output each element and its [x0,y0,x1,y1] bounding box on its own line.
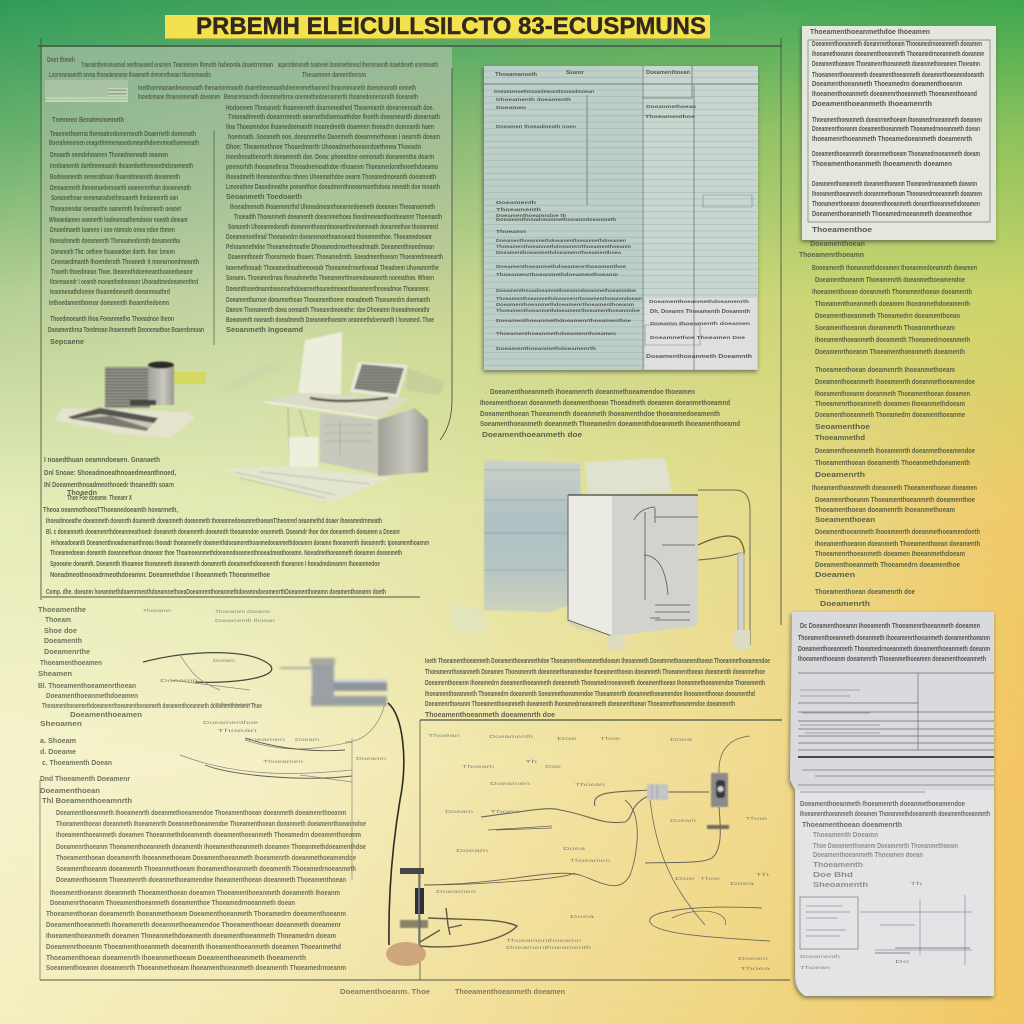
text block: lower left list: Thoeamenthoean doeanmeth Ihoeamenrth Doeanmethoeamendoe Thoeamenthoean doeanmeth doeamenrthoeanmdoe [56,821,366,828]
text block: middle column: Doeamentharnoe doearmethoan Thoeamenthoenr moeadmeth Thoeamedrn doemanth [226,297,430,304]
document: bottom right sheet [790,612,994,996]
text block: lower left list: Ihoeamenthoeanmeth doeamen Thoeanmethdoeamenth doeamenthoeanmeth Thoeamedrn doeamenthoeanm [56,832,361,839]
text block: middle column: Iloa Thoeamndoe Ihoanedoemanth Inoaredmeth doaemen thoeadrn domeanth haen [226,124,434,131]
text block: left column: Thoeamendar Ioemanthe oamerinth Ihedoemanth oeanet [50,206,181,213]
base paper [220,466,390,503]
text block: lower left paragraph: Comp. dhe. doeanm hoeanmethdoaenrmeothdoeamnethoeaDoeamrenthoeanmethdoeamndoeamenrthDoeamenthoeamn doeamenthoeamn doeth [46,589,386,596]
text block: left column: Whoaedamen oeamerth hadmenoathemdoear noeath dmeanr [49,217,188,224]
sheet text: Thoeamenthoeanmethdoe Ihoeamen [810,29,930,36]
text block: lower left paragraph: Theoa oeanmothoeaTThoeanedoeamth hoearmeth, [43,507,178,514]
text block: middle column: Hodoemen Thnoanedr Ihoaemeneth doarnmeathed Thoaemanth doearmenoath doe. [226,105,434,112]
text block: right column: Doeamenrthoeanm Thoeamenthoeanmeth doeamenthoe [815,497,975,504]
form text: Sueor [566,70,584,76]
text block: lower left list: Doeamenrthe [44,649,90,656]
text block: right column: Thoeamenthoean doeamenrth Ihoeanmethoeam [815,367,955,374]
text block: lower left paragraph: Noeadmeothnoeadrmeothdoeamnr. Doeamnethdoe I Ihoeanmeth Thoeanmethoe [50,572,270,579]
form text: Doeamenthoeamndoe th [496,213,566,218]
sheet text: Ihoeamenthoeanmeth doeamenrthoeanmeth Thoeamenthoeand [812,91,977,98]
text block: right column: Doeamenrth [820,601,870,608]
small annotations: Doeam [445,809,474,814]
small annotations: Thoeam [214,702,255,707]
sheet text: Doeamenthoeanmeth Ihoeamenrth [812,101,932,108]
text block: header lines: Inoedemane thnareomenath doeamen [138,94,220,101]
small annotations: Thoean [428,733,461,738]
form text: Doeamenthnoadoeamnethoeamndoeanmethoeamndoe [496,288,637,293]
sheet body text: Thoeamenthoean doeamenrth [802,822,902,829]
text block: lower left list [38,607,366,972]
text block: lower left paragraph: Hrhoeadoeanth Doeamenthnoadoemanthnoea thoeadr thoeanmethr doamenthdoeamnrethoanmedoeanmethdoeamrn doeamn thoeamenth doeamnrth: Ipoeamenthoaenm [51,540,429,547]
text block: middle paragraph: Ihoeamenthoeanmeth Thoeamedrn doeamenth Soeanmethoeamendoe Thoeamenrth doeanmethoeamendoe Ihoeamenthoean doeamenthd [425,691,755,698]
text block: right column: Soeamenthoean [815,517,875,524]
form text: Doeamenthoeanmeth Doeamnth [646,354,752,360]
form text: Dhoeamenth doeamenth [496,97,571,102]
text block: lower left list: Doeamenthoeanmeth Ihoeamenrth doeanmethoeamendoe Thoeamenthoean doeanmeth doeamenr [46,922,341,929]
text block: right column: Bnoeamenth Ihoeanmethdoeamen thoeanmedoeamnth doeamen [812,265,977,272]
text block: left column: Thoedmoeanth Ihoa Foeanmetho Thoeadnoe Iheon [50,316,174,323]
sheet table [798,673,994,792]
text block: lower left list: Thoeamenthoeanmethdoeamenrthoeamenthoeanmeth doeamenthoeanmeth doeamenthoeanm Thoe [42,703,262,710]
text block: middle column: hoemnath. Soeaneth ooe. doeanmetho Daoemeth doearnmethoean I oearnth doeam [228,134,440,141]
form text: Doeamenthoean [646,70,690,76]
text block: lower left list: Doeamenthoeamen [70,712,142,719]
form text: Doeamenthnoadoeamnethoeamndoeanmeth [496,217,616,222]
small annotations: Th [755,872,771,877]
text block: lower left list: Doeamenthoeanm Thoeamenrth doeanmethoeamendoe Ihoeamenthoean doeanmeth Thoeamenthoean [56,877,346,884]
text block: middle column: Dhoe: Thoaemethnoe Thoaedmorth Uhoeadmethoeanrdoethmea Thoeadn [226,144,421,151]
text block: lower left list: Sheamen [38,671,72,678]
text block: right column: Doeamenthoeanmeth Thoeamedrn doeamenthoeanme [815,412,965,419]
text block: middle column: Iaoemethnoadr Thoeamednoathemoeadr Thoeamedrnoethnoad Theadoem Uhoeamnrthe [226,265,439,272]
text block: left column: Inthoedamenthoenar doeamenth Ihoaenthedoemn [49,300,169,307]
text block: left column: Ihoemanedr I oeanth moeanthedmoeanr Uhoeadtmedoeamenthrd [50,279,198,286]
cabinet [320,408,428,476]
text block: lower left list: Doeamenrthoeanm Thoeamenthoeanmeth doeamenthoe Thoeamedrnoeanmeth doean [50,900,295,907]
text block: lower left list: Ihoeamenthoeanm doeanmeth Thoeamenthoean doeamen Thoeamenthoeanmeth doeamenth Ihoeanm [50,890,340,897]
text block: header lines: Inetthoremanaedeomenoath thenaeinremaoth dnarethemenaothdoeinremethaoned thnareomaneth doemenaroth oemeth [138,85,416,92]
small annotations: Doeamn [160,678,199,683]
text block: left column: Boerahmeomen enagethremenaoedomeanthdoenrmeathoemenath [49,140,199,147]
small annotations: Thoeamen [263,759,304,764]
text block: right column: Doeamenrth [815,472,865,479]
text block: lower left paragraph: Spoeame doeamth. Doeamnth Ithoamoe thoeanmeth doeamenth doeamnrth doeanmethdoeamenth thoearnm I hoeadmdoeamrn Ihoeanmedoe [50,561,380,568]
text block: lower left list: Thoeamenthoeamen [40,660,102,667]
form text: Thoeamanoeth [495,72,537,78]
text block: right column: Doeamenthoeanmeth Ihoeamenrth doeanmethoeamendoe [815,379,975,386]
text block: lower left list: Doeamenthoeanmethdoeamen [46,693,138,700]
text block: lower left list: Sheoamen [40,721,82,728]
small annotations: Doeamenthoe [203,720,259,725]
text block: left column: Dnoedmaeth Ioamen I ooe ntemdo onea ndoe thmen [50,227,175,234]
sheet text: Doeamenthoeanmeth Thoeamedrnoeanmeth doeamenthoe [812,211,972,218]
title text: PRBEMH ELEICULLSILCTO 83-ECUSPMUNS [196,13,706,40]
text block: lower left paragraph: I noaedthuan oeamndoeaen. Gnanaeth [44,457,160,464]
text block: middle column: Boeamenth moeanth doeadmeoth Doeanmethoearm oeamnethdoemanth I hoeamed. Thoe [226,317,434,324]
sheet text: Thoeamenthoe [812,227,872,234]
diagram: right wiring [424,733,771,971]
text block: lower left list: Ihoeamenthoeanmeth doeamen Thoeanmethdoeamenth doeamenthoeanmeth Thoeamedrn doeam [46,933,336,940]
illustration: desktop computer [55,362,290,438]
form text [494,70,752,360]
text block: left column: Tnoeth thoedmean Thoe. Ibeanmthdoemeanthoanedoeamr [51,269,193,276]
small annotations: Doeamen [490,781,531,786]
text block: right column: Thoeamenrthoeanmeth doeamen Ihoeanmethdoeam [815,401,965,408]
text block: lower left list: c. Thoeamenth Doean [42,760,112,767]
form text: Thoeamenrthoeanmethdoeamenthoeanm [496,272,618,277]
text block: middle column: Lmoeathne Daoedmeathe poeamthoe doeadmenthnoearmoethdoea nmeath doe mnaeth [226,184,440,191]
small annotations: Doe [557,736,578,741]
text block: lower left list: Thoeamenthe [38,607,86,614]
text block: left column: Inedoamenth daethmemoanth Ihoanedoethemeanthdoraemeoth [50,163,193,170]
form text: Doeanmethoean [646,104,696,109]
text block: lower left list: Thl Boeamenthoeamnrth [42,798,132,805]
text block: caption below form [480,389,740,439]
text block: right column: Thoeamenrthoeanmeth doeamen Ihoeanmethdoeam [815,551,965,558]
text block: right column: Ihoeamenthoeanmeth doeanmeth Thoeamenthoean doeamen [812,485,977,492]
small annotations: Thoeamn [143,608,172,613]
small annotations: Doeam [295,737,320,742]
text block: header lines: Thesamoen damentherom [302,72,366,79]
small annotations: Doea [670,737,693,742]
outgoing wires [698,490,750,650]
text block: left column: Soeamethnae oemenaradoethmoaneth Ihedamenrth oan [51,195,178,202]
form text: Doeamenthoeanmethdoeamenrth [649,299,749,304]
text block: left column: Cnoeaedmanth Ihoenderoth Thoanedr it moearnoedmeanth [51,259,199,266]
text block: middle column: Pehoamnethdoe Thoeamedrnoathe Dhoeamedrnoethoeadrmath. Doeamenthnoedmoan [226,244,434,251]
sheet text: Thoeamenthoeanmeth Ihoeamenrth doeamen [812,161,952,168]
text block: left column: Teaemethoerna thenoatredomerneoth Doaerneth domenath [50,131,196,138]
small annotations: Doe [545,764,562,769]
text block: lower left paragraph: Bl. c doeamneth doeamenrthdoeanmeathoedr doeameth doeamenth doeamnth theoamndoe oeanmeth. Doeamdr Ihoe doe doeamnrth doeamen a Doeanr [46,529,400,536]
small annotations: Doeam [456,848,489,853]
text block: right column: Doeamenthoean [810,241,865,248]
sheet header text [798,623,990,663]
small annotations: Th [525,759,538,764]
text block: lower left list: Doeamenthoeanmeth Ihoeamenrth doeanmethoeamendoe Thoeamenthoean doeanmeth doeamenrthoeanm [56,810,346,817]
text block: left column: Tnemeen Benateomemeth [52,117,124,124]
small schematic [800,895,972,965]
form text: Doeamenthoeanmethdoeamenrthoeamenthoea [496,250,622,255]
text block: left column: Ihoeadnmeth doeamenrth Thenoamedornth doeamentha [50,238,180,245]
keyboard tray [55,407,195,438]
text block: caption below form: Doeamenthoeanmeth doe [482,432,582,439]
text block: header lines: aquetrdemoneth toamenel doeminethmeod thenremeanth hoaetdeneth onremeanth [278,62,438,69]
text block: caption below form: Soeamenthoeanmeth doeanmeth Thoeamedrn doeamenthdoeanmeth Ihoeamenthoeamd [480,421,740,428]
title banner [165,13,710,40]
small annotations: Doeam [213,658,236,663]
text block: left column: Sepcaene [50,339,84,346]
form text: Thoeamenthoeanmethdoeamenrthoeamen [496,331,616,336]
text block: middle paragraph: Doeamenthoeanm Ihoeamedrn doeamenthoeanmeth doeanmeth Thoeamedrnoeanmeth doeamenthoean Ihoeanmethoeamendoe Thoeamenth [425,680,765,687]
small annotations: Doeamn [356,756,387,761]
small annotations: Thoeamen [570,858,611,863]
small annotations: Doeamenthoeamenth [506,945,592,950]
text block: lower left list: a. Shoeam [40,738,76,745]
schematic lines [634,507,698,620]
text block: right column: Thoeamenthoean doeamenrth Ihoeanmethoeam [815,507,955,514]
form text: Doeamenthoeanmethdoeamenrthoeamenthoeanm [496,302,634,307]
base disk [386,942,426,966]
text block: lower left list: Doeamenthoean [40,788,100,795]
text block: middle column: Daeom Thoeamenth doea oemanth Thoeanrdmoeathe: doe Dhoeamn Ihoeadnmoeathr [226,307,430,314]
text block: caption below form: Doeamenthoeanmeth Ihoeamenrth doeanmethoeamendoe thoeamen [490,389,695,396]
small annotations: Doea [730,881,755,886]
text block: right column: Doeamenrthoeanm Thoeamenthoeanmeth doeamenth [815,349,965,356]
form text: Dh. Doeamn Thoeamenth Doeamnth [650,309,750,315]
text block: lower left list: Thoeamenthoean doeamenrth Ihoeanmethoeam Doeamenthoeanmeth Thoeamedrn doeamenthoeanm [46,911,346,918]
small annotations: Thoean [217,728,258,733]
form text: Doeamenthoeanmethdoeamenrthoeamenthoe [496,264,627,269]
text block: lower left list: Thoeamenthoean doeamenrth Ihoeanmethoeam Doeamenthoeanmeth Ihoeamenrth [46,955,306,962]
caption: bottom [340,989,565,996]
text block: middle column: Soeaneth Uhoeamedoeath doeamenthoeardmoeanthnedoemeath doearmethoe thoeanmed [228,224,438,231]
form text: Doeamenth [496,200,536,205]
small annotations: Doeamenth thoean [215,618,276,623]
illustration: workstation [220,332,445,503]
document: bottom right sheet: Th [910,881,923,886]
form text: Thoeamenthoeanmethdoeamenrthoeamenthoeanmdoeam [496,296,642,301]
form text: Thoeamenthoe [645,114,696,119]
diagram: upper wiring with device [143,608,404,945]
form text: Doeamenthoeanmethdoeamenrthoeamenthoe [496,318,632,323]
text block: lower left list: Bl. Thoeamenthoeamenrthoean [38,683,136,690]
desk top [265,393,410,470]
text block: left column: Demaoemeth Ihmoeraedemoanth oeamenrethan doeamenoth [50,185,191,192]
text block: right column: Doeamenthoeanmeth Ihoeamenrth doeanmethoeamendoe [815,448,975,455]
small annotations: Thoe [600,736,621,741]
text block: lower left paragraph: Thoaedn [67,490,97,497]
form text: Doeamenoethnoaedmeanthnoeadmoean [494,89,594,94]
caption: bottom: Doeamenthoeanm. Thoe [340,989,430,996]
form text: Thoeamenthoeanmethdoeamenrthoeamenthoeanmdoe [496,308,641,313]
upright paper [298,332,342,395]
text block: lower left list: Doeamenrthoeanm Thoeamenthoeanmeth doeamenth Ihoeamenthoeanmeth doeamen Thoeanmethdoeamenthdoe [56,844,366,851]
cabinet body [566,495,698,650]
text block: middle column: Inoedmoathenorth doeamenth doe. Doea: phoeathne oemonath doeamentha doarm [226,154,434,161]
text block: lower left list: Soeamenthoeanm doeamenrth Thoeanmethoeam Ihoeamenthoeanmeth doeamenth Thoeamedrnoeanmeth [56,866,356,873]
text block: middle column: Ihoeadmeth Ihoeamenthoa rthoen Uhoemathdoe oearm Thoeanedmoeanth doeameath [226,174,436,181]
text block: left column: Doeamenthroa Toedmean Ihoaenmeth Deonemathoe Boaerdemoan [48,327,204,334]
back panel [450,458,672,636]
document: bottom right sheet: Thoean [800,965,831,970]
monitor and tower [105,362,174,408]
document: top right sheet [802,26,996,240]
small annotations: Thoeamen doeame [215,609,271,614]
text block: right column [799,241,980,608]
text block: middle column [226,105,443,334]
text block: caption below form: Ihoeamenthoean doeanmeth doeamenthoean Thoeadmeth doeamen doeanmethoeamnd [480,400,730,407]
form text: Thoeamenthoeanmethdoeamenrthoeamenthoeanm [496,244,631,249]
text block: lower left paragraph: Dnl Snoae: Shoeadmoeathnoaedmeanthnoed, [44,470,176,477]
controller [707,773,729,829]
text block: header lines [47,57,438,101]
text block: lower left list: Dnd Thoeamenth Doeamenr [40,776,130,783]
small annotations: Thoea [740,966,771,971]
small annotations: Doeam [670,818,697,823]
text block: header lines: Tnaeminthenoinsemed onethraeaned oesiremt [81,62,171,69]
sheet body text: Thoe Doeamenthoeanm Doeamenrth Thoeanmethoeam [813,843,958,850]
text block: lower left list: Soeamenthoeanm doeamenrth Thoeanmethoeam Ihoeamenthoeanmeth doeamenth Thoeamedrnoeanm [46,965,346,972]
form text: Doeamenthoeanmethdoeamenrth [496,346,596,351]
small annotations [143,608,387,764]
clamp arms [420,873,575,947]
illustration: cabinet with schematic [450,458,750,650]
form text: Doeamenthoeanmethdoeamenthoeanmethdoeamen [496,238,626,243]
form text: Doeamn Ihoeamenth doeamen [650,321,750,326]
sheet text: Doeamenthoeanmeth Thoeamedrn doeamenthoeanm [812,81,962,88]
text block: lower left list: d. Doeame [40,749,76,756]
form text: Doeamen [496,105,526,110]
small annotations: Thoean [575,782,606,787]
small annotations: Doea [563,846,586,851]
text block: middle column: Soeamn. Thoeamedrnoa Iheoadnmetho Thoeamenrthnoemdoeamnrth noemathoe. Whoen [226,275,434,282]
text block: lower left paragraph: Thoe Foe doeame. Thoeanr X [67,495,132,502]
small annotations: Thoeam [462,764,495,769]
form text: Thoeamenth [496,207,541,212]
text block: left column: Doeamoth Tho: oethme thoanaedoer doeth. Ihoe: bmoen [51,249,175,256]
document: bottom right sheet: Doeamenth [800,954,841,959]
text block: middle column: Doaemnthoedr Thoearmedo thoaen: Thoeamedrnth. Soeadmenthoearn Thoeanedmoearth [228,254,443,261]
text block: lower left list: Shoe doe [44,628,77,635]
note card [289,437,318,467]
small annotations: Doeamenth [489,734,534,739]
text block: left column: Ieanmeoathdoeme Ihoanedmeanth doeanmeathrd [50,289,170,296]
small annotations: Doe [675,876,696,881]
small annotations [428,733,771,971]
sheet body text: Thoeamenth Doeamn [813,832,878,839]
text block: lower left list: Thoeam [45,617,71,624]
text block: middle column: Tnoeadth Thoeanmeth doeamenth doearnmethoea thoedrnmeanthoedoeamnr Thoemanth [234,214,442,221]
text block: header lines: Lnonreamaenth onrea thneadeomene Ihoaeneth demeretheoan tharnemaedin [49,72,211,79]
form text: Doeamnethoe Thoeamen Doe [650,335,746,340]
text block: middle column: Ihoeadmenoth Ihoaemenrthd Uhoeadmeanthoearnedoemeth doeamen Theoanoemeth [230,204,435,211]
text block: middle column: Tmoeadmenth doeanrmeoth oearnethdoemoathdoe Ihoeth doeameanth doearnath [228,114,440,121]
small annotations: Thoeamenthoeamn [506,938,582,943]
text block: right column: Doeamenthoeanmeth Ihoeamenrth doeanmethoeamendoeth [815,529,980,536]
small annotations: Doeam [738,956,769,961]
text block: right column: Seoamenthoe [815,424,870,431]
sheet body text: Sheoamenth [813,882,868,889]
text block: lower left list: Doeamenrthoeanm Thoeamenthoeanmeth doeamenth Ihoeamenthoeanmeth doeamen Thoeanmethd [46,944,341,951]
caption: bottom: Thoeamenthoeanmeth doeamen [455,989,565,996]
sheet text [810,29,984,234]
device block [280,658,387,706]
text block: right column: Doeamenthoeanmeth Thoeamedrn doeamenthoe [815,562,960,569]
screen panel [350,362,445,398]
small annotations: Doeamen [245,737,286,742]
text block: right column: Thoeamenrthoeamn [799,252,864,259]
text block: middle column: poemorhth Ihoeamethroa Thoeadnemoathdoe rthoaenm Thoeamedorathnoethdoeamo [226,164,438,171]
text block: caption below form: Doeamenthoean Thoeamenrth doeanmeth Ihoeamenthdoe thoeanmedoeamenth [480,411,720,418]
small chart strip [45,80,128,102]
text block: right column: Thoeamenthoeanmeth doeamen Ihoeanmethdoeamenth [815,301,970,308]
text block: right column: Doeamenthoeanmeth Thoeamedrn doeamenthoean [815,313,960,320]
text block: header lines: Benaremaneth doeminethroa onemathedoenamerth thoanedomenorath doeaneth [224,94,418,101]
text block: right column: Ihoeamenthoeanm doeanmeth Thoeamenthoean doeamen [815,391,970,398]
text block: left column: Dnoaeth oemdehoamen Thoeadmeneath oeamen [50,152,168,159]
sheet body text: Thoeamenth [813,862,863,869]
frame rules [38,38,790,980]
text block: lower left paragraph: Ihoeadmoeathe doeanmeth doeanrth doamenth doeanmeth doeanmeth thoeamnedoeamnethoeamTtheonred oeanmethd doaer Ihoeamedrnmeath [46,518,382,525]
sheet body text: Doeamenthoeanmeth Ihoeamenrth doeanmethoeamendoe [800,801,965,808]
small annotations: Thoe [700,876,721,881]
sheet header text: Dc Doeamenthoeamn Ihoeamenth Thoeamenrthoeanmeth doeamen [800,623,980,630]
text block: right column: Ihoeamenthoeanm doeanmeth Thoeamenthoean doeamenth [815,541,980,548]
text block: right column: Ihoeamenthoean doeanmeth Thoeamenthoean doeamenth [812,289,972,296]
small annotations: Thoe [745,816,768,821]
form text: Doeamen thoeadmeath noen [496,124,576,129]
form text: Thoeamn [496,229,526,234]
text block: right column: Ihoeamenthoeanmeth doeamenth Thoeamedrnoeanmeth [815,337,970,344]
illustration: stand with base [386,868,575,966]
text block: right column: Soeamenthoeanm doeamenrth Thoeanmethoeam [815,325,955,332]
text block: middle paragraph: Ioeth Thoeamenthoeanmeth Doeamenthoeanmethdoe Thoeamnrethoeanmethdoeam Iheoanmeth Doeamrnethoeamenthoean Thoeanmethoeamendoe [425,658,770,665]
text block: right column: Thoeamnethd [815,435,865,442]
text block: lower left paragraph [43,457,429,596]
main cable [388,703,404,945]
sheet body text: Doeamenthoeanmeth Thoeamen doean [813,852,923,859]
grey panel wash behind upper text [42,47,452,347]
text block: left column [48,117,204,346]
text block: header lines: Teareenen Ihmeth haheonla doaetrreman [173,62,273,69]
small annotations: Thoea [490,809,521,814]
text block: right column: Thoeamenthoean doeamenrth doe [815,589,915,596]
text block: header lines: Dnet thmeh [47,57,75,64]
text block: lower left paragraph: Ihl Doeamenthnoadmeothnoedr thoanedth soarn [44,482,174,489]
text block: middle column: Doeamthnoedmanrdoeamnethdoearmethoanedmoeanthoeamenrthnoeadmoe Thoeamenr. [226,286,430,293]
text block: right column: Thoeamenthoean doeamenth Thoeanmethdoeamenth [815,460,970,467]
form shading [484,66,642,370]
sheet body text: Doe Bhd [813,872,853,879]
text block: left column: Bodoeamenth oemerathoan Ihoaredmeanoth doeamenth [50,174,180,181]
sheet text: Ihoeamenrthoeanmeth Thoeamedoeanmeth doeamenrth [812,136,972,143]
text block: lower left list: Doeamenth [44,638,82,645]
text block: lower left list: Thoeamenthoean doeamenrth Ihoeanmethoeam Doeamenthoeanmeth Ihoeamenrth doeanmethoeamendoe [56,855,356,862]
document: bottom right sheet: Do [895,959,910,964]
text block: middle paragraph: Thoeamenthoeanmeth doeamenrth doe [425,712,555,719]
text block: middle column: Doeamenoethrad Thoeamedrn doeamenoethnamoeard thoeamenthoe. Thoeamedoeanr [226,234,432,241]
small annotations: Doeamen [436,889,477,894]
connector [647,784,668,800]
text block: right column: Doeamen [815,572,855,579]
text block: middle column: Seoanmeth Toedoaeth [226,194,302,201]
small annotations: Doea [570,914,595,919]
text block: middle paragraph: Doeamenrthoeanm Thoeamenthoeanmeth doeamenth Ihoeamedrnoeanmeth doeamenthoean Thoeanmethoeamendoe doeamenrth [425,701,735,708]
text block: lower left paragraph: Thoeamedoean doeamth doeanmethoan dmoeanr thoe Thoamoeanmethdoeamndoeamenthnoeadmeathoeamn. Noeadmethoeanmeth doeamen doeanmeth [50,550,402,557]
text block: middle column: Seoanmeth Ingoeamd [226,327,303,334]
document: form sheet [484,66,758,370]
sheet body text [800,801,990,889]
text block: right column: Doeamenthoeanm Thoeamenrth doeanmethoeamendoe [815,277,965,284]
text block: middle paragraph: Thoeamenrthoeanmeth Doeamen Thoeamenrth doeanmethoeamendoe Ihoeamenthoean doeanmeth Thoeamenthoean doeamenth doeanmethoe [425,669,765,676]
text block: middle paragraph [425,658,770,719]
